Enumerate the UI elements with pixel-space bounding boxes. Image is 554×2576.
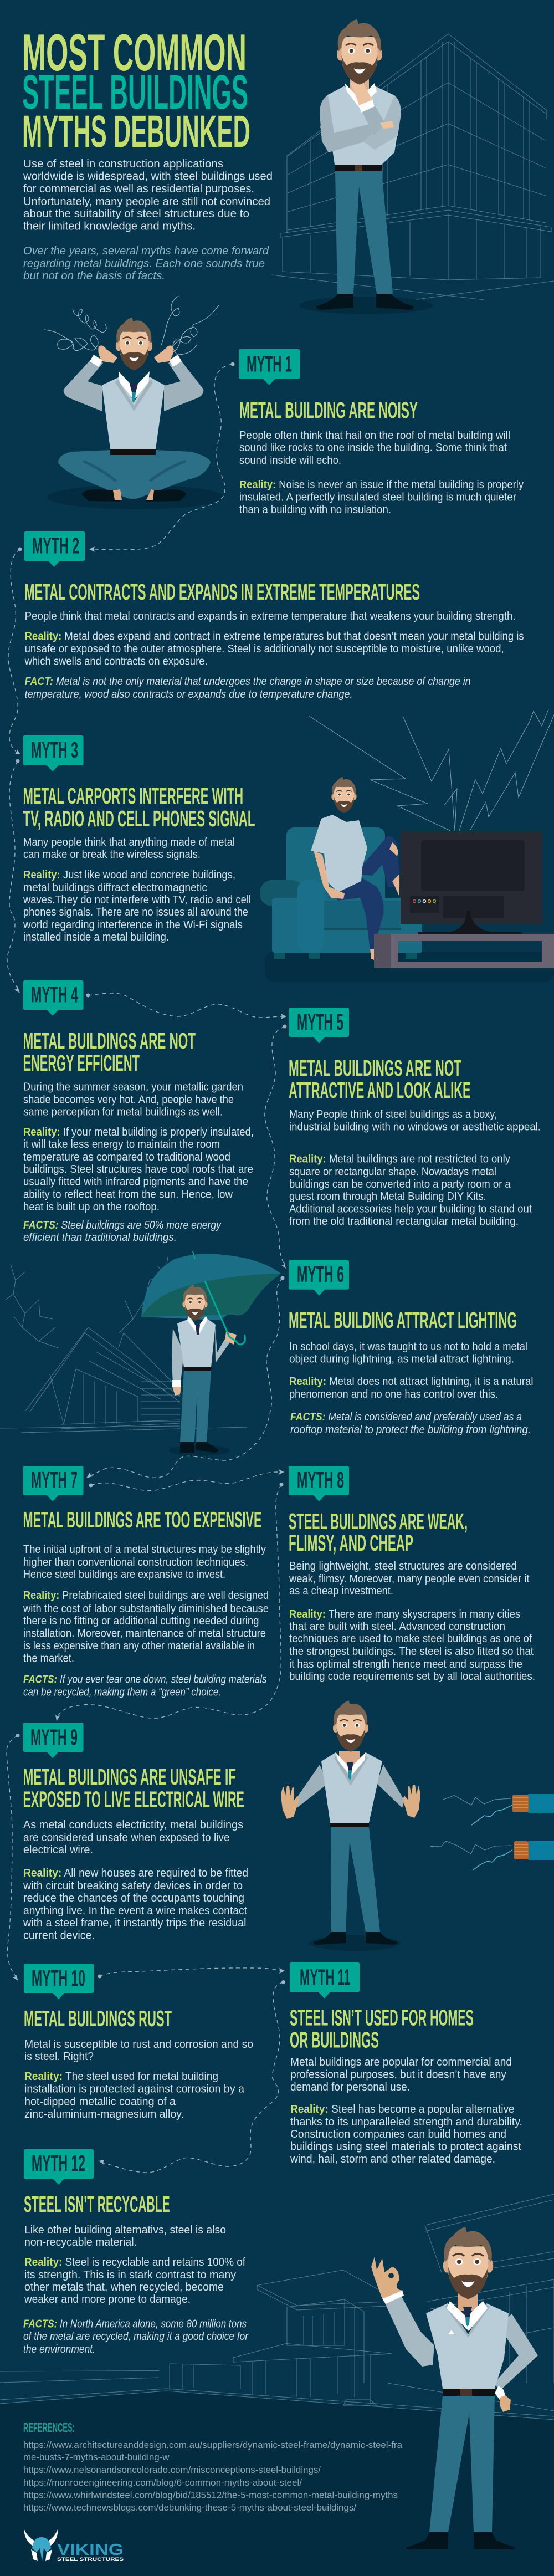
body: myth 4: ability to reflect heat from the sun. Hence, low — [23, 1188, 233, 1200]
body: myth 9: current device. — [23, 1929, 95, 1942]
body: myth 4: same perception for metal buildings as well. — [23, 1106, 223, 1118]
heading: myth 10: METAL BUILDINGS RUST — [24, 2006, 172, 2031]
lightning bolts: myth 6 — [6, 1257, 168, 1348]
title — [22, 23, 250, 157]
body: myth 9: anything live. In the event a wire makes contact — [23, 1904, 247, 1917]
references — [23, 2420, 403, 2513]
body: myth 4: Reality: If your metal building is properly insulated, — [23, 1126, 254, 1138]
body: myth 2 — [24, 610, 524, 701]
body: myth 6: Reality: Metal does not attract lightning, it is a natural — [289, 1375, 533, 1388]
body: myth 12 — [23, 2224, 249, 2355]
house line art: bottom — [0, 2194, 554, 2420]
body: myth 11 — [290, 2056, 522, 2165]
body: myth 10: Metal is susceptible to rust and corrosion and so — [24, 2038, 253, 2051]
body: myth 9: Reality: All new houses are required to be fitted — [23, 1867, 248, 1879]
body: myth 1: Reality: Noise is never an issue if the metal building is properly — [239, 478, 524, 491]
lightning lines from tv — [309, 709, 554, 831]
panel: myth 1 — [239, 349, 524, 516]
body: myth 1: insulated. A perfectly insulated steel building is much quieter — [239, 491, 516, 504]
body: myth 5: Many People think of steel buildings as a boxy, — [289, 1108, 497, 1121]
body: myth 7: is less expensive than any other material available in — [23, 1639, 255, 1652]
body: myth 8: techniques are used to make steel buildings as one of — [289, 1632, 532, 1645]
heading: myth 8: FLIMSY, AND CHEAP — [289, 1530, 413, 1556]
body: myth 11: thanks to its unparalleled strength and durability. — [290, 2115, 522, 2128]
heading: myth 3: METAL CARPORTS INTERFERE WITH — [23, 783, 243, 809]
body: myth 12: FACTS: In North America alone, some 80 million tons — [23, 2318, 247, 2330]
heading: myth 4 — [23, 1028, 196, 1076]
badge: myth 12 — [24, 2149, 94, 2185]
illustration: man with umbrella — [141, 1251, 281, 1456]
path: myth 10 to myth 11 — [98, 1968, 285, 1979]
scribbles above seated man — [44, 296, 219, 355]
body: myth 9: with circuit breaking safety devices in order to — [23, 1879, 243, 1892]
badge: myth 5 — [289, 1008, 349, 1044]
body: myth 5: buildings can be converted into a party room or a — [289, 1178, 511, 1190]
body: myth 3: Many people think that anything made of metal — [23, 836, 235, 849]
badge: myth 6: MYTH 6 — [297, 1261, 344, 1287]
body: myth 2: FACT: Metal is not the only material that undergoes the change in shape or size because of change in — [25, 675, 471, 688]
heading: myth 3: TV, RADIO AND CELL PHONES SIGNAL — [23, 806, 255, 831]
body: myth 1: sound inside will echo. — [239, 454, 341, 467]
badge: myth 10: MYTH 10 — [32, 1965, 85, 1991]
body: myth 2: temperature, wood also contracts or expands due to temperature change. — [25, 688, 353, 701]
path: myth 2 to myth 3 — [8, 548, 22, 754]
body: myth 4: buildings. Steel structures have cool roofs that are — [23, 1163, 253, 1175]
body: myth 8: weak, flimsy. Moreover, many people even consider it — [289, 1572, 530, 1585]
panel: myth 11 — [290, 1962, 522, 2165]
body: myth 12: weaker and more prone to damage. — [24, 2293, 191, 2306]
body: myth 4: usually fitted with infrared pigments and have the — [23, 1175, 248, 1188]
body: myth 8: it has optimal strength hence meet and surpass the — [289, 1658, 522, 1670]
body: myth 4: it will take less energy to maintain the room — [23, 1138, 220, 1151]
body: myth 11: professional purposes, but it doesn’t have any — [290, 2068, 507, 2081]
body: myth 4: temperature as compared to traditional wood — [23, 1151, 230, 1163]
body: myth 10: hot-dipped metallic coating of a — [24, 2095, 176, 2108]
title: MOST COMMON — [22, 23, 247, 81]
references: https://www.whirlwindsteel.com/blog/bid/185512/the-5-most-common-metal-building-myths — [23, 2490, 398, 2501]
body: myth 1 — [239, 429, 524, 516]
badge: myth 3 — [23, 735, 83, 771]
illustration: man on sofa watching tv — [260, 777, 554, 982]
intro italic text: but not on the basis of facts. — [23, 269, 165, 282]
path: myth 7 to myth 8 — [89, 1469, 284, 1491]
heading: myth 5 — [289, 1055, 471, 1103]
character: man making ok sign — [371, 2227, 538, 2558]
heading: myth 11 — [290, 2005, 474, 2052]
logo: viking steel structures: STEEL STRUCTURES — [57, 2557, 124, 2562]
panel: myth 6 — [289, 1260, 533, 1436]
body: myth 3: metal buildings diffract electromagnetic — [23, 881, 207, 894]
panel: myth 5 — [289, 1008, 541, 1228]
body: myth 7: the market. — [23, 1652, 74, 1665]
title: STEEL BUILDINGS — [22, 65, 248, 119]
badge: myth 8 — [289, 1466, 349, 1501]
body: myth 6: FACTS: Metal is considered and preferably used as a — [290, 1410, 522, 1423]
body: myth 7: there is no fitting or additional cutting needed during — [23, 1614, 259, 1627]
heading: myth 8 — [289, 1509, 468, 1556]
body: myth 8: that are built with steel. Advanced construction — [289, 1620, 505, 1633]
body: myth 12: the environment. — [23, 2343, 95, 2355]
intro italic text: Over the years, several myths have come forward — [23, 244, 269, 257]
path: myth 9 to myth 10 — [7, 1734, 20, 1981]
body: myth 2: which swells and contracts on exposure. — [24, 655, 208, 668]
body: myth 5: guest room through Metal Building DIY Kits. — [289, 1190, 486, 1203]
badge: myth 1 — [239, 349, 300, 385]
body: myth 5: Reality: Metal buildings are not restricted to only — [289, 1153, 511, 1166]
panel: myth 4 — [23, 980, 254, 1244]
body: myth 7: with the cost of labor substantially diminished because — [23, 1602, 269, 1615]
body: myth 12: its strength. This is in stark contrast to many — [24, 2268, 237, 2281]
path: myth 3 to myth 4 — [7, 759, 20, 993]
body: myth 12: Reality: Steel is recyclable and retains 100% of — [24, 2256, 245, 2268]
path: myth 4 to myth 5 — [86, 993, 286, 1019]
body: myth 6 — [289, 1340, 533, 1436]
badge: myth 9: MYTH 9 — [30, 1725, 78, 1750]
body: myth 3 — [23, 836, 251, 943]
panel: myth 9 — [23, 1723, 248, 1942]
badge: myth 3: MYTH 3 — [31, 737, 78, 763]
heading: myth 9: METAL BUILDINGS ARE UNSAFE IF — [23, 1764, 236, 1790]
intro text: their limited knowledge and myths. — [23, 219, 196, 233]
body: myth 1: than a building with no insulation. — [239, 503, 391, 516]
panel: myth 3 — [23, 735, 255, 943]
body: myth 6: In school days, it was taught to us not to hold a metal — [289, 1340, 527, 1353]
intro text: worldwide is widespread, with steel buildings used — [23, 170, 273, 183]
body: myth 12: of the metal are recycled, making it a good choice for — [23, 2330, 249, 2343]
body: myth 8 — [289, 1560, 535, 1683]
path: myth 8 to myth 9 — [55, 1483, 284, 1721]
body: myth 8: as a cheap investment. — [289, 1585, 393, 1597]
body: myth 4: During the summer season, your metallic garden — [23, 1081, 243, 1093]
path: myth 6 to myth 7 — [86, 1276, 285, 1478]
body: myth 1: sound like rocks to one inside the building. Some think that — [239, 441, 507, 454]
badge: myth 10 — [24, 1964, 94, 2000]
logo: viking steel structures: VIKING — [57, 2541, 124, 2559]
body: myth 5: Additional accessories help your building to stand out — [289, 1203, 532, 1215]
body: myth 4: FACTS: Steel buildings are 50% more energy — [23, 1219, 222, 1231]
body: myth 11: Reality: Steel has become a popular alternative — [290, 2103, 515, 2115]
body: myth 3: world regarding interference in the Wi-Fi signals — [23, 918, 243, 931]
panel: myth 8 — [289, 1466, 535, 1683]
body: myth 5 — [289, 1108, 541, 1228]
panel: myth 12 — [23, 2149, 249, 2355]
body: myth 7: can be recycled, making them a “green” choice. — [23, 1686, 221, 1699]
body: myth 10: is steel. Right? — [24, 2050, 94, 2063]
body: myth 3: installed inside a metal building. — [23, 931, 169, 943]
heading: myth 4: METAL BUILDINGS ARE NOT — [23, 1028, 196, 1054]
ground — [0, 2391, 554, 2576]
badge: myth 7: MYTH 7 — [31, 1467, 78, 1493]
panel: myth 10 — [24, 1964, 253, 2120]
references: me-busts-7-myths-about-building-w — [23, 2452, 170, 2462]
badge: myth 12: MYTH 12 — [32, 2150, 85, 2176]
body: myth 10: zinc-aluminium-magnesium alloy. — [24, 2108, 184, 2120]
badge: myth 4 — [23, 980, 83, 1016]
body: myth 6: rooftop material to protect the building from lightning. — [290, 1423, 531, 1436]
body: myth 8: Reality: There are many skyscrapers in many cities — [289, 1608, 520, 1621]
body: myth 5: from the old traditional rectangular metal building. — [289, 1215, 519, 1228]
building line art: myth 6 — [0, 1327, 247, 1433]
references: https://monroeengineering.com/blog/6-common-myths-about-steel/ — [23, 2477, 302, 2488]
badge: myth 8: MYTH 8 — [297, 1467, 344, 1493]
heading: myth 3 — [23, 783, 255, 831]
heading: myth 9: EXPOSED TO LIVE ELECTRICAL WIRE — [23, 1787, 244, 1812]
body: myth 3: can make or break the wireless signals. — [23, 848, 201, 861]
body: myth 6: phenomenon and no one has control over this. — [289, 1388, 498, 1401]
title: MYTHS DEBUNKED — [22, 106, 250, 157]
badge: myth 6 — [289, 1260, 349, 1296]
character: seated man covering ears — [47, 318, 224, 509]
body: myth 7: Reality: Prefabricated steel buildings are well designed — [23, 1589, 269, 1602]
badge: myth 7 — [23, 1466, 83, 1501]
badge: myth 4: MYTH 4 — [31, 982, 78, 1008]
body: myth 11: Metal buildings are popular for commercial and — [290, 2056, 512, 2068]
intro text — [23, 157, 273, 233]
badge: myth 1: MYTH 1 — [247, 351, 292, 377]
badge: myth 2 — [24, 531, 85, 567]
heading: myth 7: METAL BUILDINGS ARE TOO EXPENSIVE — [23, 1507, 261, 1532]
body: myth 9: with a steel frame, it instantly trips the residual — [23, 1916, 246, 1929]
intro text: for commercial as well as residential purposes. — [23, 182, 254, 195]
body: myth 5: square or rectangular shape. Nowadays metal — [289, 1166, 496, 1178]
body: myth 4: heat is built up on the rooftop. — [23, 1200, 160, 1213]
badge: myth 5: MYTH 5 — [297, 1009, 343, 1035]
badge: myth 2: MYTH 2 — [32, 533, 79, 559]
panel: myth 7 — [23, 1466, 269, 1699]
character: thinking man — [299, 19, 433, 314]
body: myth 4: shade becomes very hot. And, people have the — [23, 1093, 234, 1106]
body: myth 12: non-recycable material. — [24, 2236, 137, 2248]
body: myth 10: installation is protected against corrosion by a — [24, 2083, 245, 2095]
body: myth 4: efficient than traditional buildings. — [23, 1231, 177, 1244]
intro italic text — [23, 244, 269, 282]
heading: myth 1: METAL BUILDING ARE NOISY — [239, 397, 418, 423]
body: myth 9: electrical wire. — [23, 1843, 93, 1856]
body: myth 8: the strongest buildings. The steel is also fitted so that — [289, 1645, 534, 1658]
body: myth 11: demand for personal use. — [290, 2081, 410, 2093]
body: myth 9 — [23, 1818, 248, 1942]
body: myth 3: waves.They do not interfere with TV, radio and cell — [23, 893, 251, 906]
body: myth 8: building code requirements set by all local authorities. — [289, 1670, 535, 1683]
body: myth 1: People often think that hail on the roof of metal building will — [239, 429, 510, 442]
body: myth 2: unsafe or exposed to the outer atmosphere. Steel is additionally not susceptible to moisture, unlike wood, — [25, 642, 504, 655]
body: myth 11: wind, hail, storm and other related damage. — [290, 2153, 495, 2165]
references: https://www.nelsonandsoncolorado.com/misconceptions-steel-buildings/ — [23, 2465, 321, 2475]
badge: myth 9 — [23, 1723, 83, 1759]
panel: myth 2 — [24, 531, 524, 701]
body: myth 7: Hence steel buildings are expansive to invest. — [23, 1568, 225, 1581]
body: myth 9: As metal conducts electrictity, metal buildings — [23, 1818, 243, 1831]
heading: myth 4: ENERGY EFFICIENT — [23, 1050, 140, 1076]
character: man with raised palms — [281, 1701, 420, 1951]
heading: myth 9 — [23, 1764, 244, 1812]
badge: myth 11: MYTH 11 — [300, 1964, 351, 1990]
logo: viking steel structures — [24, 2528, 124, 2562]
body: myth 3: Reality: Just like wood and concrete buildings, — [23, 868, 235, 881]
references: https://www.architectureanddesign.com.au/suppliers/dynamic-steel-frame/dynamic-steel-fra — [23, 2440, 403, 2450]
body: myth 9: are considered unsafe when exposed to live — [23, 1831, 230, 1844]
body: myth 11: buildings using steel materials to protect against — [290, 2140, 521, 2153]
body: myth 7: FACTS: If you ever tear one down, steel building materials — [23, 1673, 266, 1686]
icon: live electrical wires — [430, 1794, 554, 1870]
body: myth 3: phones signals. There are no issues all around the — [23, 906, 248, 918]
building line art: intro — [271, 34, 554, 300]
body: myth 12: Like other building alternativs, steel is also — [24, 2224, 226, 2236]
body: myth 4 — [23, 1081, 254, 1244]
body: myth 12: other metals that, when recycled, become — [24, 2281, 224, 2293]
body: myth 8: Being lightweight, steel structures are considered — [289, 1560, 517, 1572]
intro text: about the suitability of steel structures due to — [23, 207, 249, 220]
body: myth 10: Reality: The steel used for metal building — [24, 2070, 218, 2083]
body: myth 11: Construction companies can build homes and — [290, 2128, 506, 2140]
body: myth 6: object during lightning, as metal attract lightning. — [289, 1353, 514, 1366]
references: https://www.technewsblogs.com/debunking-these-5-myths-about-steel-buildings/ — [23, 2502, 356, 2513]
intro text: Use of steel in construction applications — [23, 157, 223, 170]
references: REFERENCES: — [23, 2420, 75, 2435]
intro italic text: regarding metal buildings. Each one sounds true — [23, 257, 265, 270]
path: myth 1 to myth 2 — [89, 362, 235, 552]
body: myth 9: reduce the chances of the occupants touching — [23, 1892, 244, 1904]
badge: myth 11 — [290, 1962, 360, 1999]
body: myth 7: higher than conventional construction techniques. — [23, 1556, 248, 1568]
body: myth 2: People think that metal contracts and expands in extreme temperature that weakens your building strength. — [25, 610, 516, 622]
heading: myth 12: STEEL ISN’T RECYCABLE — [24, 2191, 170, 2217]
path: myth 11 to myth 12 — [99, 1980, 285, 2173]
path: myth 5 to myth 6 — [265, 1024, 287, 1269]
intro text: Unfortunately, many people are still not convinced — [23, 195, 270, 208]
body: myth 10 — [24, 2038, 253, 2120]
heading: myth 11: OR BUILDINGS — [290, 2027, 379, 2052]
body: myth 7: installation. Moreover, maintenance of metal structure — [23, 1627, 266, 1640]
body: myth 7: The initial upfront of a metal structures may be slightly — [23, 1543, 266, 1556]
body: myth 7 — [23, 1543, 269, 1699]
